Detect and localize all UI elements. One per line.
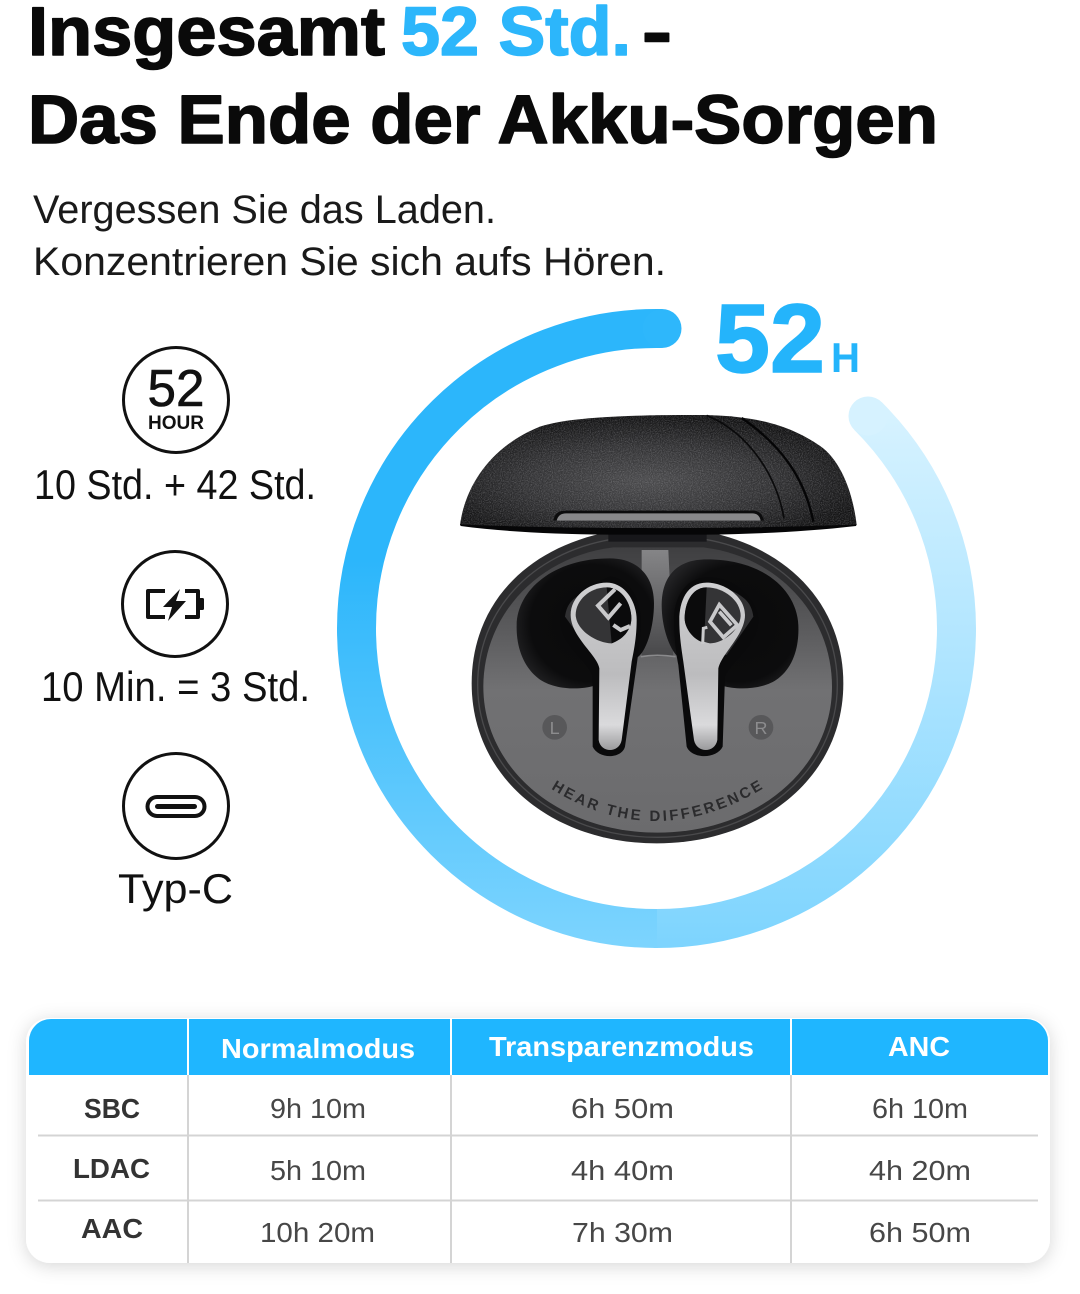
table header labels	[221, 1031, 950, 1064]
table row labels: AAC	[81, 1213, 143, 1244]
table row labels: LDAC	[73, 1153, 150, 1184]
table header labels: ANC	[888, 1031, 950, 1062]
right earbud	[674, 577, 758, 756]
table values: 4h 20m	[869, 1155, 971, 1186]
table values: 10h 20m	[260, 1217, 375, 1248]
engraved slogan: HEAR THE DIFFERENCE	[552, 780, 762, 821]
table values: 7h 30m	[572, 1217, 673, 1248]
R marker	[749, 715, 773, 740]
case body	[472, 532, 843, 843]
table row labels: SBC	[84, 1093, 140, 1124]
title	[28, 0, 938, 158]
left cavity	[517, 558, 654, 688]
icon: 52 hour: HOUR	[148, 413, 204, 434]
L marker: L	[550, 718, 560, 738]
hinge	[608, 522, 707, 542]
R marker: R	[754, 718, 767, 738]
subtitle: Konzentrieren Sie sich aufs Hören.	[33, 240, 666, 284]
left earbud	[560, 577, 641, 756]
table values: 5h 10m	[270, 1155, 366, 1186]
icon: fast charge battery	[122, 552, 228, 656]
label: 10 Std. + 42 Std.: 10 Std. + 42 Std.	[34, 461, 316, 508]
label: 10 Min. = 3 Std.: 10 Min. = 3 Std.	[41, 663, 310, 710]
table row labels	[73, 1093, 150, 1244]
L marker	[542, 715, 567, 740]
earbuds charging case	[460, 414, 857, 844]
table header labels: Transparenzmodus	[489, 1031, 754, 1062]
table values: 6h 50m	[571, 1093, 674, 1124]
icon: USB type-C	[124, 754, 228, 858]
52H label: 52	[715, 284, 825, 393]
table values: 6h 50m	[869, 1217, 971, 1248]
table header bar	[29, 1019, 1048, 1075]
earbud tray details	[517, 550, 798, 756]
label: Typ-C: Typ-C	[118, 865, 233, 912]
icon: 52 hour	[124, 348, 228, 452]
centre ridge	[642, 550, 673, 657]
right cavity	[662, 559, 798, 688]
battery ring	[356, 309, 956, 929]
table grid	[38, 1019, 1038, 1263]
52H label: H	[831, 334, 860, 381]
subtitle	[33, 188, 666, 284]
table values: 4h 40m	[571, 1155, 674, 1186]
icon: 52 hour: 52	[148, 360, 204, 418]
table header labels: Normalmodus	[221, 1033, 415, 1064]
table values	[260, 1093, 971, 1248]
table values: 6h 10m	[872, 1093, 968, 1124]
table card	[26, 1018, 1050, 1263]
tray ledge	[641, 655, 676, 657]
subtitle: Vergessen Sie das Laden.	[33, 188, 496, 232]
title: Das Ende der Akku-Sorgen	[28, 81, 938, 158]
lid	[460, 415, 857, 535]
table values: 9h 10m	[270, 1093, 366, 1124]
